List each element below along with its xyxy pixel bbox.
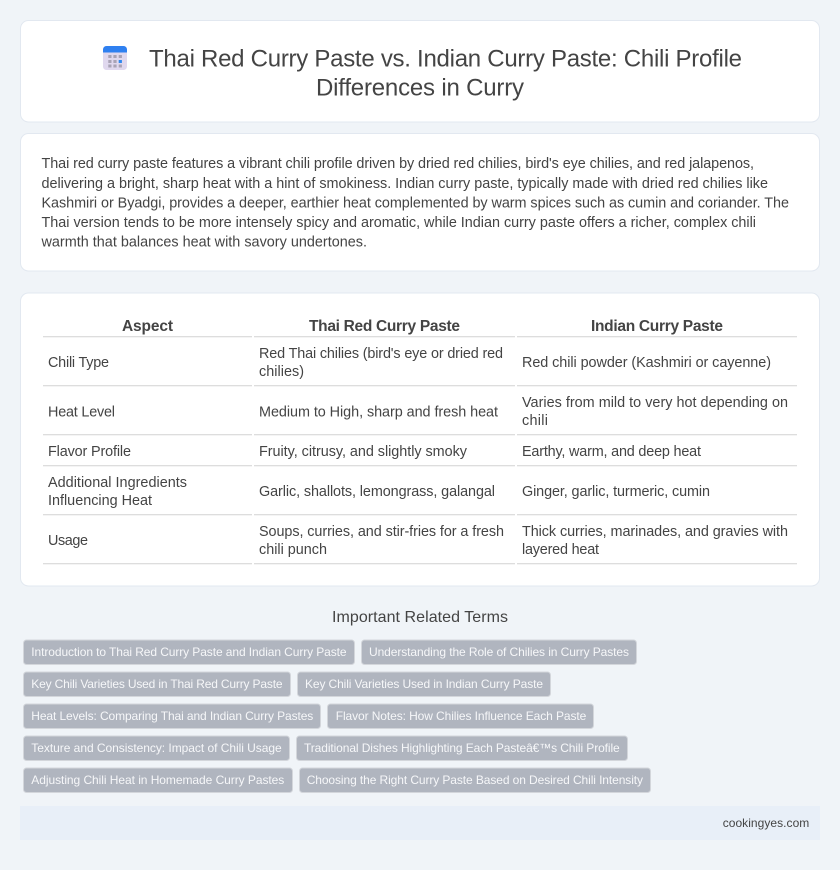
row: flavor profile: Flavor Profile <box>48 444 131 460</box>
tag: Key Chili Varieties Used in Indian Curry Paste <box>305 677 543 691</box>
row: usage: Usage <box>48 533 88 549</box>
table header row: Thai Red Curry Paste <box>309 318 460 335</box>
row: additional ingredients <box>48 475 710 509</box>
table header row: Indian Curry Paste <box>591 318 723 335</box>
footer <box>20 806 820 840</box>
tag: Traditional Dishes Highlighting Each Pasteâ€™s Chili Profile <box>304 741 620 755</box>
tag <box>24 672 290 696</box>
row: heat level: Medium to High, sharp and fresh heat <box>259 404 498 420</box>
row: chili type <box>48 346 771 380</box>
tag: Flavor Notes: How Chilies Influence Each Paste <box>336 709 587 723</box>
tag <box>24 704 320 728</box>
row: heat level: chili <box>522 413 548 429</box>
row: heat level <box>48 395 788 429</box>
row: additional ingredients: Ginger, garlic, turmeric, cumin <box>522 484 710 500</box>
tag <box>296 736 628 760</box>
footer site name: cookingyes.com <box>723 816 809 830</box>
row: chili type: Chili Type <box>48 355 109 371</box>
panel: description <box>20 134 820 271</box>
table header row: Aspect <box>122 318 173 335</box>
tag <box>298 672 550 696</box>
row: chili type: Red chili powder (Kashmiri or cayenne) <box>522 355 771 371</box>
icon: calendar <box>103 46 127 70</box>
title: Differences in Curry <box>316 74 524 102</box>
row: usage: Soups, curries, and stir-fries for a fresh <box>259 524 504 540</box>
tag <box>24 768 292 792</box>
description text: delivering a bright, sharp heat with a hint of smokiness. Indian curry paste, typically made with dried red chilies like <box>42 176 768 192</box>
heading: important related terms: Important Related Terms <box>332 609 508 626</box>
tag <box>24 736 290 760</box>
description text <box>40 156 789 250</box>
title: Thai Red Curry Paste vs. Indian Curry Paste: Chili Profile <box>149 46 742 72</box>
row: flavor profile: Earthy, warm, and deep heat <box>522 444 701 460</box>
row: additional ingredients: Additional Ingredients <box>48 475 187 491</box>
panel: related term tags <box>24 640 650 792</box>
title <box>149 46 742 102</box>
description text: warmth that balances heat with savory undertones. <box>40 234 367 250</box>
description text: Thai red curry paste features a vibrant chili profile driven by dried red chilies, bird's eye chilies, and red jalapenos, <box>42 156 754 172</box>
row: usage: chili punch <box>259 542 327 558</box>
tag: Choosing the Right Curry Paste Based on Desired Chili Intensity <box>307 773 643 787</box>
row: usage: layered heat <box>522 542 599 558</box>
tag <box>300 768 650 792</box>
row: heat level: Varies from mild to very hot depending on <box>522 395 788 411</box>
panel: comparison table <box>20 293 820 586</box>
row: additional ingredients: Garlic, shallots, lemongrass, galangal <box>259 484 495 500</box>
tag: Understanding the Role of Chilies in Curry Pastes <box>369 645 629 659</box>
tag: Key Chili Varieties Used in Thai Red Curry Paste <box>31 677 283 691</box>
tag: Texture and Consistency: Impact of Chili Usage <box>31 741 282 755</box>
row: flavor profile <box>48 444 701 460</box>
table header row <box>122 318 723 335</box>
tag: Introduction to Thai Red Curry Paste and Indian Curry Paste <box>31 645 347 659</box>
description text: Thai version tends to be more intensely spicy and aromatic, while Indian curry paste offers a richer, complex chili <box>42 215 756 231</box>
tag <box>328 704 594 728</box>
tag <box>362 640 636 664</box>
description text: Kashmiri or Byadgi, provides a deeper, earthier heat complemented by warm spices such as cumin and coriander. The <box>42 196 789 212</box>
row: chili type: chilies) <box>259 364 304 380</box>
tag: Heat Levels: Comparing Thai and Indian Curry Pastes <box>31 709 313 723</box>
tag <box>24 640 354 664</box>
panel: title header <box>20 20 820 122</box>
row: flavor profile: Fruity, citrusy, and slightly smoky <box>259 444 468 460</box>
row: usage: Thick curries, marinades, and gravies with <box>522 524 788 540</box>
row: chili type: Red Thai chilies (bird's eye or dried red <box>259 346 503 362</box>
row: heat level: Heat Level <box>48 404 115 420</box>
row: usage <box>48 524 788 558</box>
tag: Adjusting Chili Heat in Homemade Curry Pastes <box>31 773 284 787</box>
row: additional ingredients: Influencing Heat <box>48 493 152 509</box>
